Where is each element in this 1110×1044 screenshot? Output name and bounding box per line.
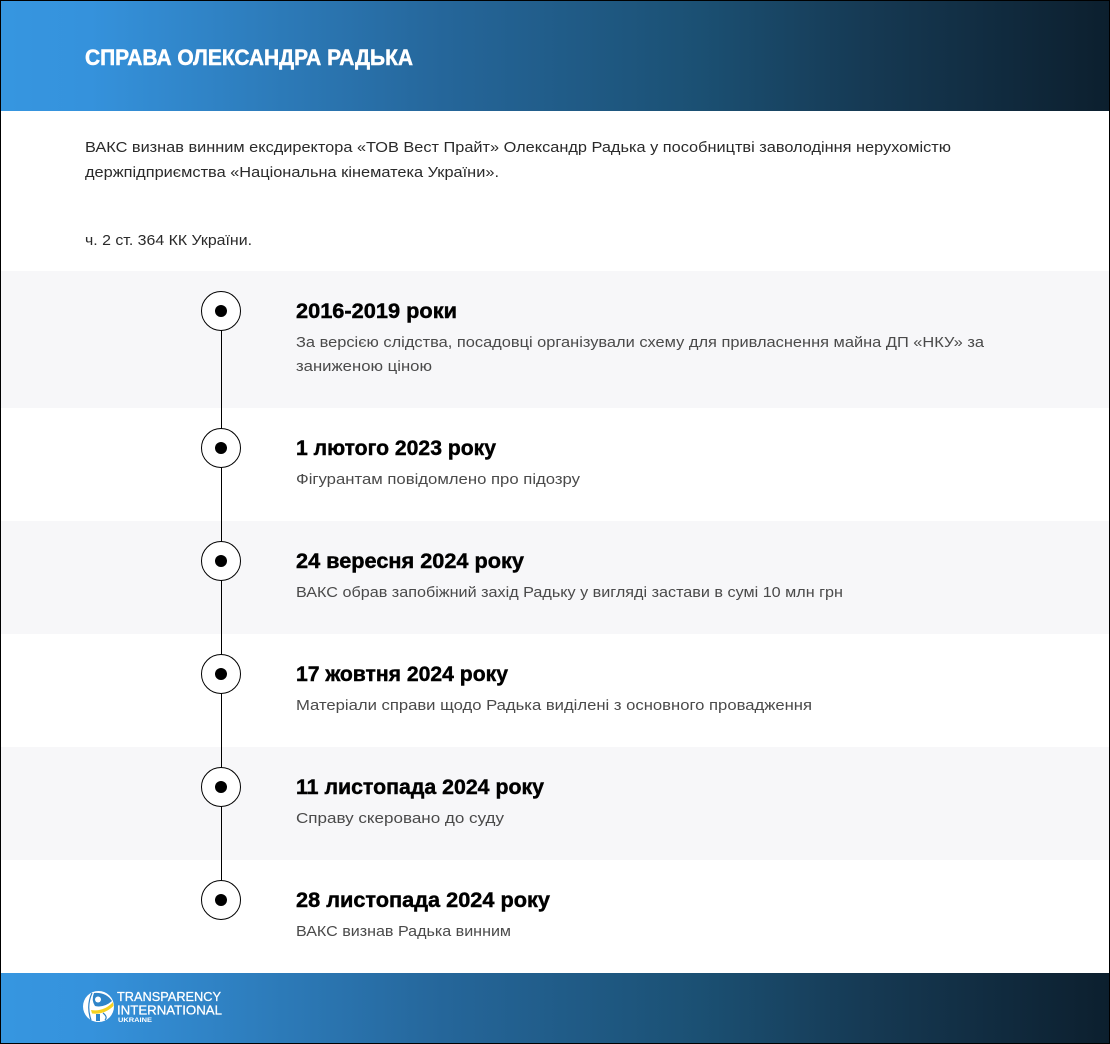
event: 1 February 2023: Фігурантам повідомлено про підозру [296,471,581,488]
event: 24 September 2024: ВАКС обрав запобіжний захід Радьку у вигляді застави в сумі 10 млн грн [296,584,843,601]
event: 17 October 2024: Матеріали справи щодо Радька виділені з основного провадження [296,697,812,714]
event: 2016-2019: 2016-2019 роки [296,299,457,323]
event: 11 November 2024 [202,768,544,827]
event: 17 October 2024: 17 жовтня 2024 року [296,662,508,686]
event: 1 February 2023 [202,428,581,488]
footer banner [1,973,1109,1043]
event: 11 November 2024: 11 листопада 2024 року [296,775,544,799]
intro text [85,139,951,181]
event: 28 November 2024 [202,880,550,940]
logo wordmark [117,990,222,1024]
timeline background bands [1,271,1109,860]
title: СПРАВА ОЛЕКСАНДРА РАДЬКА [85,45,413,70]
logo wordmark: INTERNATIONAL [117,1004,222,1018]
legal article: ч. 2 ст. 364 КК України. [85,232,252,249]
timeline axis [220,311,222,900]
icon: globe with figure [83,991,114,1022]
event: 11 November 2024: Справу скеровано до суду [296,810,505,827]
event: 17 October 2024 [202,654,812,714]
logo wordmark: UKRAINE [118,1018,152,1024]
logo wordmark: TRANSPARENCY [117,990,222,1004]
logo: Transparency International Ukraine [83,990,222,1024]
intro text: ВАКС визнав винним ексдиректора «ТОВ Вест Прайт» Олександр Радька у пособництві заволодіння нерухомістю [85,139,951,156]
event: 24 September 2024 [202,542,843,601]
event: 28 November 2024: ВАКС визнав Радька винним [296,923,511,940]
event: 2016-2019: заниженою ціною [296,358,432,375]
event: 28 November 2024: 28 листопада 2024 року [296,888,550,912]
event: 2016-2019: За версією слідства, посадовці організували схему для привласнення майна ДП «НКУ» за [296,334,985,351]
event: 2016-2019 [202,292,985,375]
event: 24 September 2024: 24 вересня 2024 року [296,549,524,573]
intro text: держпідприємства «Національна кінематека України». [85,164,499,181]
event: 1 February 2023: 1 лютого 2023 року [296,436,496,460]
header banner [1,1,1109,111]
